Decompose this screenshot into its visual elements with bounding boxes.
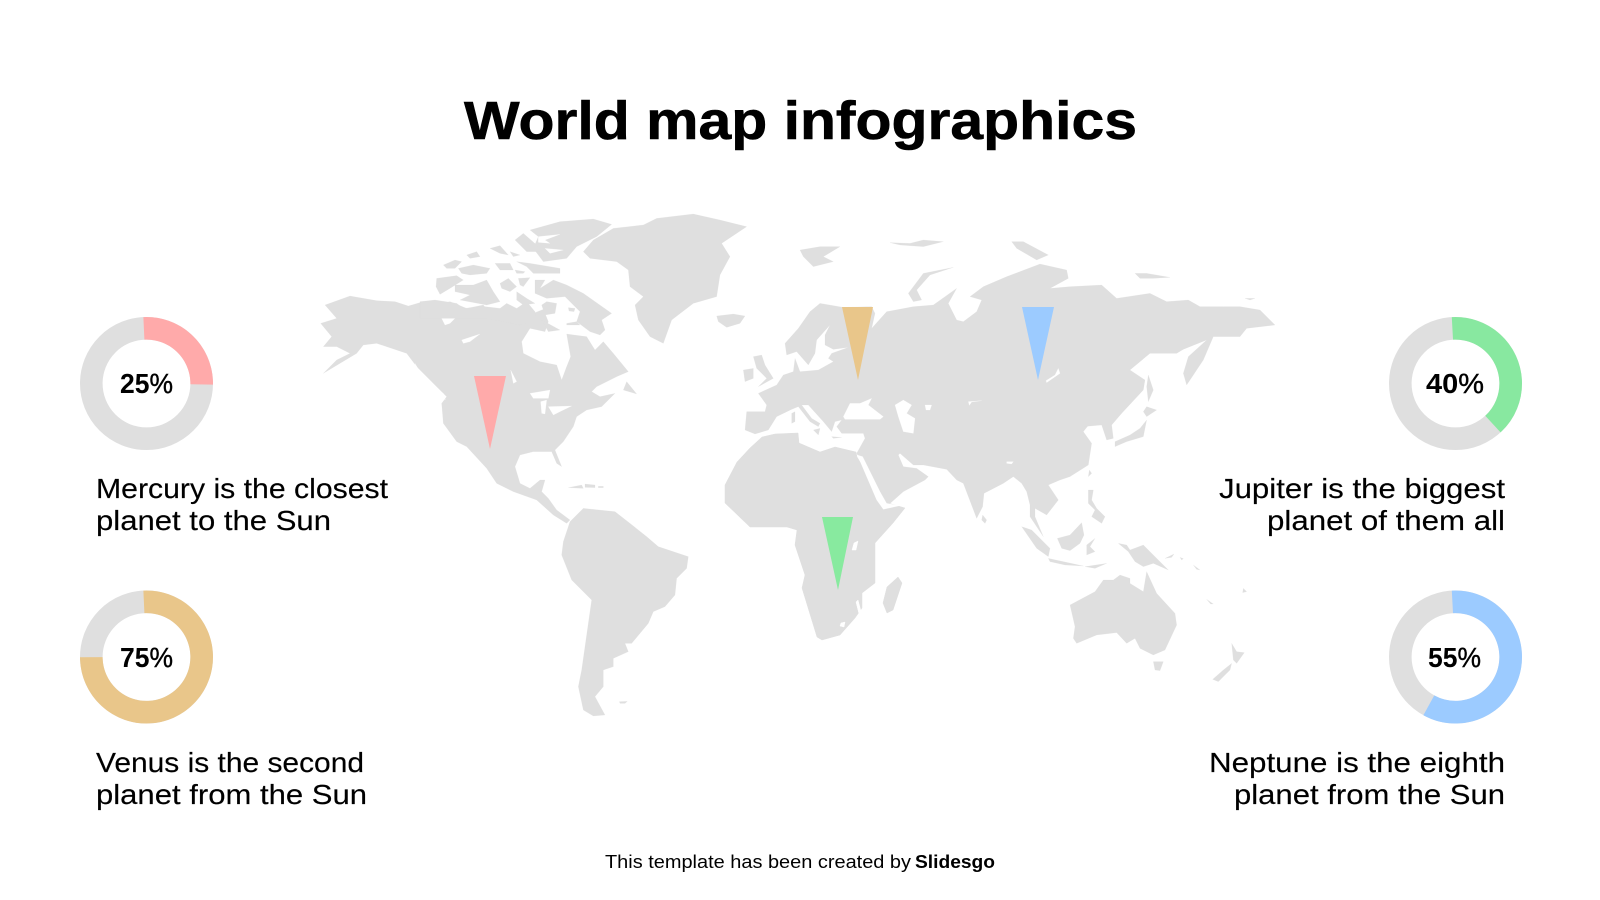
text: mercury: [96, 473, 388, 536]
map: eurasia: [743, 240, 1275, 537]
text: venus: planet from the Sun: [96, 779, 367, 810]
text: mercury: planet to the Sun: [96, 505, 331, 536]
text: neptune: [1209, 747, 1505, 810]
donut: 40 percent: [1397, 325, 1514, 442]
donut: 75 percent: 75%: [120, 642, 173, 673]
text: venus: Venus is the second: [96, 747, 364, 778]
text: neptune: Neptune is the eighth: [1209, 747, 1505, 778]
footer credit: Slidesgo: [915, 852, 995, 872]
text: venus: [96, 747, 367, 810]
footer credit: This template has been created by: [605, 852, 911, 872]
map: north america: [321, 214, 747, 523]
map: africa: [725, 433, 905, 640]
text: jupiter: [1219, 473, 1505, 536]
title: World map infographics: [464, 91, 1137, 151]
marker: green triangle africa: [822, 517, 853, 590]
text: jupiter: Jupiter is the biggest: [1219, 473, 1505, 504]
text: neptune: planet from the Sun: [1234, 779, 1505, 810]
donut: 40 percent: 40%: [1426, 368, 1484, 399]
donut: 55 percent: [1397, 599, 1514, 715]
donut: 25 percent: [89, 326, 204, 441]
marker: red triangle north america: [474, 376, 506, 449]
donut: 55 percent: 55%: [1428, 642, 1481, 673]
map: south america: [562, 508, 688, 716]
marker: orange triangle europe: [842, 307, 873, 380]
marker: blue triangle asia: [1022, 307, 1054, 380]
donut: 75 percent: [89, 599, 204, 715]
text: jupiter: planet of them all: [1267, 505, 1505, 536]
map: southeast asia and oceania: [1022, 490, 1247, 682]
donut: 25 percent: 25%: [120, 368, 173, 399]
world map: [321, 214, 1275, 716]
map: canadian arctic islands: [420, 219, 612, 335]
text: mercury: Mercury is the closest: [96, 473, 388, 504]
